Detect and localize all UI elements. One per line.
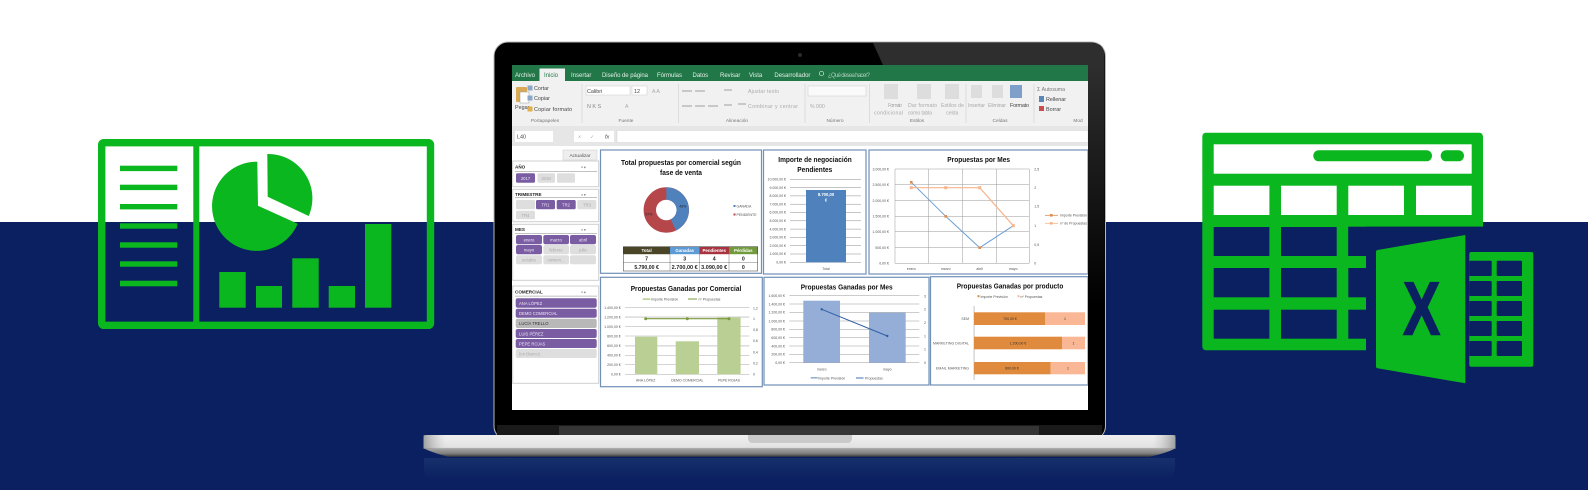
slicer: MES: marzo [550,238,562,242]
legend: nº Propuestas [698,298,721,302]
title: Propuestas Ganadas por Mes [801,282,893,292]
line chart: mayo [1009,267,1018,271]
excel ribbon: Número [826,118,844,124]
slicer: AÑO [513,161,599,187]
slicer: MES: octubre [522,258,537,262]
excel ribbon: Eliminar [988,103,1006,109]
excel ribbon: Portapapeles [531,118,560,124]
summary table: 2.700,00 € [672,265,698,271]
combo chart: 1.400,00 € [604,306,621,310]
combo chart: 1 [753,317,755,321]
title: Propuestas Ganadas por Comercial [631,284,741,293]
legend: nº Propuestas [1020,295,1043,299]
line chart: 1,5 [1034,204,1039,208]
bar chart: 9.000,00 € [769,186,786,190]
bar chart: 4.000,00 € [769,227,786,231]
legend [1045,214,1087,226]
combo chart: mayo [883,368,892,372]
combo chart: 1.200,00 € [768,311,785,315]
combo chart: 1.600,00 € [768,294,785,298]
excel ribbon [512,81,1088,146]
combo chart: 0 [924,361,926,365]
icon: spreadsheet table with Excel logo [1202,133,1533,383]
line chart: enero [907,267,916,271]
excel ribbon: celda [946,110,959,116]
line chart: 2.000,00 € [872,199,889,203]
combo chart [768,294,926,372]
line chart: 2,5 [1034,167,1039,171]
donut chart [645,187,689,230]
excel ribbon: Σ Autosuma [1037,87,1065,93]
excel ribbon: N K S [587,104,601,110]
bar chart: 6.000,00 € [769,211,786,215]
slicer: TRIMESTRE: TR1 [542,202,550,207]
combo chart: 200,00 € [607,363,621,367]
slicer button [563,150,597,160]
combo chart: 3 [924,294,926,298]
slicer: MES: febrero [549,248,563,252]
horizontal bar chart: SEM [961,317,969,321]
excel ribbon: Copiar formato [534,107,572,113]
excel window [512,65,1088,410]
excel ribbon: 12 [634,89,640,95]
excel ribbon: Combinar y centrar [748,104,798,110]
excel ribbon: Estilos de [941,103,964,109]
title: Importe de negociación [778,155,852,164]
bar chart: Total [822,267,830,271]
excel ribbon: % 000 [810,104,825,110]
combo chart: 1.000,00 € [604,325,621,329]
icon: paste [516,87,527,102]
legend: Propuestas [865,376,883,380]
excel ribbon: Copiar [534,96,550,102]
combo chart: 1.200,00 € [604,315,621,319]
slicer: COMERCIAL: PEPE ROJAS [519,341,546,346]
slicer: COMERCIAL [513,286,599,383]
combo chart: DEMO COMERCIAL [671,378,703,382]
bar chart: 8.000,00 € [769,194,786,198]
summary table: 0 [742,265,745,271]
slicer: MES: ≡ ▾ [581,228,586,232]
excel ribbon: Celdas [993,118,1008,124]
slicer: TRIMESTRE: TR3 [583,202,592,207]
excel ribbon: Formato [1010,103,1029,109]
slicer: AÑO: 2017 [521,176,531,181]
line chart: 0,00 € [879,262,889,266]
excel ribbon: Calibri [587,89,602,95]
donut legend: PENDIENTE [736,213,757,217]
bar chart: 10.000,00 € [768,178,786,182]
laptop base [424,435,1176,457]
combo chart: 0,00 € [775,361,785,365]
excel tab bar: Vista [749,73,763,79]
combo chart: 800,00 € [771,328,785,332]
excel tab bar: Diseño de página [602,73,649,79]
line chart: 1 [1034,224,1036,228]
bar chart: 0,00 € [776,260,786,264]
excel ribbon: Alineación [726,118,748,124]
summary table: Total [642,248,652,253]
horizontal bar chart [933,306,1085,380]
formula bar: L40 [517,134,526,140]
line chart: 3.000,00 € [872,167,889,171]
excel tab bar [512,65,1088,81]
combo chart: 0,4 [753,350,758,354]
donut legend [734,204,757,217]
bar chart [768,178,861,271]
combo chart: ANA LÓPEZ [636,378,656,382]
excel tab bar: Archivo [515,73,536,79]
line chart: 1.000,00 € [872,230,889,234]
bar chart: 2.000,00 € [769,244,786,248]
excel tab bar: Insertar [571,73,591,79]
donut legend: GANADA [736,204,752,208]
summary table [623,247,758,271]
horizontal bar chart: 700,00 € [1003,317,1017,321]
title: Propuestas Ganadas por producto [957,282,1064,290]
slicer: AÑO: AÑO [515,164,526,170]
combo chart: 800,00 € [607,334,621,338]
combo chart: PEPE ROJAS [718,378,741,382]
panel: importe de negociación [764,150,866,274]
background: navy bottom band [0,222,1588,490]
slicer: MES [513,224,599,280]
title: fase de venta [660,168,703,177]
summary table: 7 [645,257,648,263]
bar chart: 1.000,00 € [769,252,786,256]
combo chart: 2 [924,321,926,325]
combo chart [604,306,758,382]
slicer: TRIMESTRE: ≡ ▾ [581,193,586,197]
legend [643,298,721,302]
line chart: 0 [1034,262,1036,266]
line chart: marzo [941,267,951,271]
horizontal bar chart: MARKETING DIGITAL [933,342,969,346]
excel ribbon: Fuente [619,118,634,124]
formula bar: ✓ [590,134,594,140]
formula bar: × [578,134,581,140]
legend: Importe Previsión [980,295,1008,299]
combo chart: 0,00 € [611,373,621,377]
combo chart: 600,00 € [771,336,785,340]
excel ribbon: Insertar [968,103,985,109]
slicer: TRIMESTRE: TR4 [522,213,530,218]
excel ribbon: A [625,104,629,110]
bar chart: 7.000,00 € [769,202,786,206]
combo chart: 200,00 € [771,353,785,357]
summary table: 0 [742,257,745,263]
title [778,155,852,174]
excel tab bar: ¿Qué desea hacer? [828,73,871,79]
slicer: TRIMESTRE: TRIMESTRE [515,192,542,197]
slicer: COMERCIAL: LUIS PÉREZ [519,331,544,336]
title [621,158,741,177]
excel ribbon: Estilos [910,118,925,124]
screen background [512,65,1088,410]
title: Pendientes [797,165,832,174]
formula bar [515,130,1088,142]
slicer: MES: abril [579,238,587,242]
excel ribbon: condicional [874,110,903,116]
horizontal bar chart: 1 [1067,366,1069,370]
combo chart: 1 [924,348,926,352]
slicer: COMERCIAL: LUCÍA TRELLO [519,321,549,326]
line chart: 0,5 [1034,243,1039,247]
slicer: COMERCIAL: ANA LÓPEZ [519,301,543,306]
slicer: AÑO: ≡ ▾ [581,166,586,170]
base notch [748,435,852,443]
excel ribbon: Cortar [534,86,549,92]
excel tab bar: Inicio [544,73,559,79]
background: white top band [0,0,1588,222]
combo chart: 400,00 € [771,344,785,348]
panel: propuestas ganadas por mes [764,277,929,385]
slicer: COMERCIAL: DEMO COMERCIAL [519,311,558,316]
legend: nº de Propuestas [1060,222,1087,226]
line chart: 1.500,00 € [872,215,889,219]
title: Propuestas por Mes [947,155,1010,164]
excel tab bar: Revisar [720,73,740,79]
combo chart: 0 [753,373,755,377]
donut chart: 57% [645,212,653,216]
excel ribbon: Dar formato [908,103,937,109]
excel ribbon: A A [652,89,660,95]
slicer: MES: mayo [524,248,535,252]
bar chart: 3.000,00 € [769,236,786,240]
camera [798,53,802,57]
formula bar: fx [605,134,609,140]
excel tab bar: Fórmulas [657,73,682,79]
excel ribbon: Rellenar [1046,97,1066,103]
legend [978,295,1043,299]
summary table: Pendientes [702,248,726,253]
slicer: TRIMESTRE: TR2 [562,202,571,207]
summary table: 4 [713,257,716,263]
hinge [497,425,1102,435]
slicer: MES: noviem... [548,258,564,262]
combo chart: 2 [924,308,926,312]
title: Total propuestas por comercial según [621,158,741,167]
excel ribbon: Ajustar texto [748,89,779,95]
combo chart: 1.000,00 € [768,319,785,323]
slicer: MES: MES [515,227,525,232]
line chart [872,167,1039,271]
bar chart: 8.700,00 [818,192,835,197]
excel ribbon: como tabla [908,110,932,116]
line chart: abril [976,267,983,271]
summary table: 5.790,00 € [634,265,659,271]
combo chart: 1,2 [753,306,758,310]
legend: Importe Previsión [1060,214,1087,218]
horizontal bar chart: EMAIL MARKETING [936,366,969,370]
laptop [424,42,1176,480]
excel ribbon: Borrar [1046,107,1061,113]
summary table: Pérdidas [734,248,753,253]
combo chart: 0,6 [753,339,758,343]
summary table: 3 [683,257,686,263]
excel ribbon: Mod [1073,118,1083,124]
horizontal bar chart: 1 [1073,342,1075,346]
slicer: MES: julio [578,248,587,252]
line chart: 2.500,00 € [872,183,889,187]
slicer: MES: enero [524,238,535,242]
donut chart: 43% [679,204,686,208]
panel: propuestas por mes [869,150,1088,274]
panel: total propuestas donut [600,150,762,273]
combo chart: 1.400,00 € [768,302,785,306]
legend: Importe Previsión [818,376,845,380]
panel: propuestas ganadas por comercial [600,277,762,387]
slicer: AÑO: 2018 [541,176,551,181]
combo chart: 1 [924,334,926,338]
bar chart: € [825,198,828,202]
combo chart: 600,00 € [607,344,621,348]
line chart: 2 [1034,186,1036,190]
excel ribbon: Pegar [515,105,530,111]
line chart: 500,00 € [875,246,889,250]
slicer: TRIMESTRE [513,189,599,222]
icon: dashboard with list, pie and bars [102,142,430,326]
slicer: COMERCIAL: (en blanco) [519,351,541,356]
laptop lid bezel [494,42,1106,440]
bezel glare [873,43,1104,65]
bar chart: 5.000,00 € [769,219,786,223]
legend: Importe Previsión [651,298,678,302]
summary table: 3.090,00 € [701,265,727,271]
excel tab bar: Desarrollador [774,73,810,79]
laptop reflection [424,458,1175,480]
panel: propuestas ganadas por producto [930,277,1088,385]
horizontal bar chart: 1.200,00 € [1010,342,1026,346]
slicer: COMERCIAL: ≡ ▾ [581,290,586,294]
combo chart: 0,8 [753,328,758,332]
slicer button: Actualizar [569,153,591,159]
icon: spreadsheet table with Excel logo: X [1403,266,1440,350]
combo chart: 400,00 € [607,354,621,358]
horizontal bar chart: 1 [1064,317,1066,321]
combo chart: 0,2 [753,362,758,366]
excel tab bar: Datos [692,73,708,79]
summary table: Ganadas [675,248,695,253]
excel ribbon: Formato [888,103,902,109]
slicer: COMERCIAL: COMERCIAL [515,290,543,294]
horizontal bar chart: 800,00 € [1005,366,1019,370]
legend [811,376,883,380]
combo chart: marzo [817,368,827,372]
